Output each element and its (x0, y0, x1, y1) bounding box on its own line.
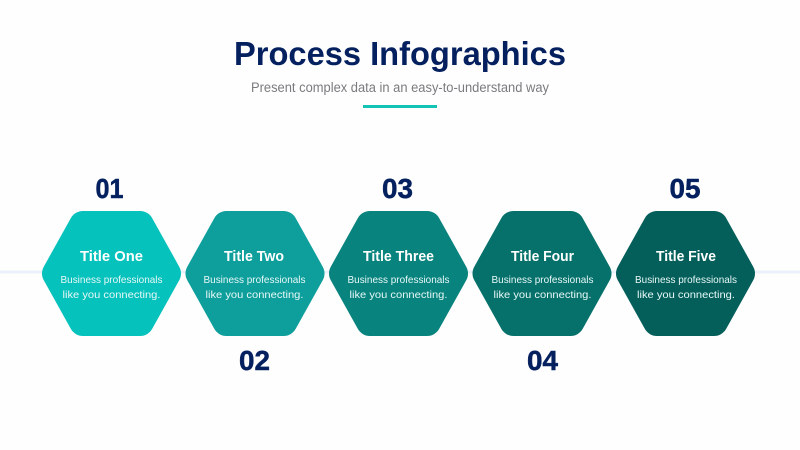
step 3 (343, 173, 454, 322)
number 05: 05 (670, 173, 700, 204)
body 5 (635, 274, 737, 301)
hexagon 2 (200, 225, 310, 322)
connecting line (0, 270, 800, 274)
body 3: like you connecting. (350, 289, 448, 301)
body 5: like you connecting. (637, 289, 735, 301)
body 5: Business professionals (635, 274, 737, 286)
heading 1: Title One (80, 248, 143, 265)
heading 5: Title Five (656, 248, 716, 265)
accent underline (363, 105, 437, 108)
number 03: 03 (382, 173, 413, 204)
step 4 (486, 225, 598, 376)
step 5 (630, 173, 741, 322)
title: Process Infographics (234, 35, 566, 72)
body 3: Business professionals (348, 274, 450, 286)
body 1: like you connecting. (62, 289, 160, 301)
step 1 (56, 173, 167, 322)
hexagon 5 (630, 225, 741, 322)
body 4 (492, 274, 594, 301)
subtitle: Present complex data in an easy-to-understand way (251, 80, 549, 95)
heading 4: Title Four (511, 248, 574, 265)
hexagon 4 (486, 225, 598, 322)
step 2 (200, 225, 310, 376)
body 2: Business professionals (204, 274, 306, 286)
body 4: like you connecting. (494, 289, 592, 301)
body 2 (204, 274, 306, 301)
body 1: Business professionals (60, 274, 162, 286)
number 02: 02 (239, 345, 270, 376)
hexagon 3 (343, 225, 454, 322)
hexagon 1 (56, 225, 167, 322)
number 04: 04 (527, 345, 558, 376)
body 3 (348, 274, 450, 301)
heading 3: Title Three (363, 248, 434, 265)
number 01: 01 (96, 173, 124, 204)
body 2: like you connecting. (206, 289, 304, 301)
body 4: Business professionals (492, 274, 594, 286)
body 1 (60, 274, 162, 301)
heading 2: Title Two (224, 248, 284, 265)
